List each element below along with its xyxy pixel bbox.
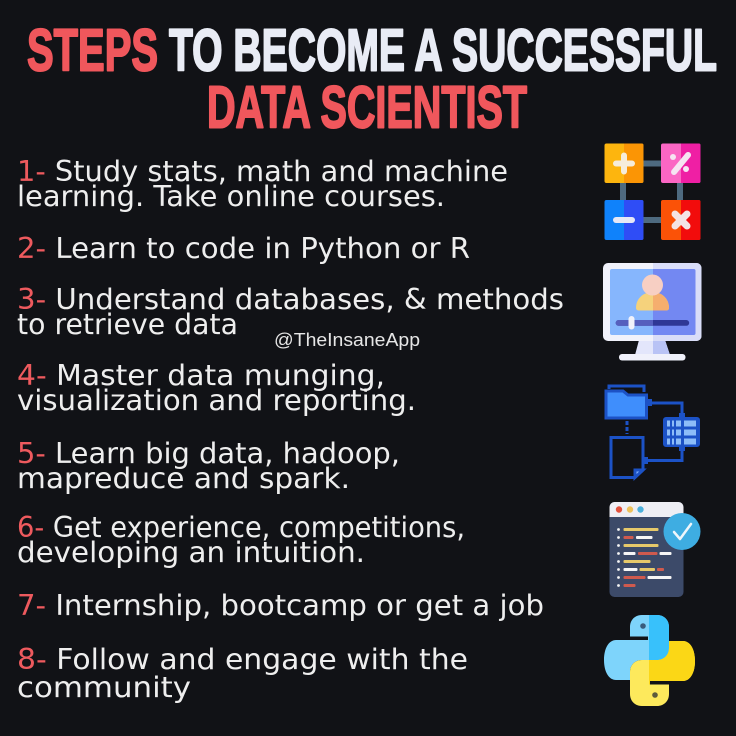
step 6 text: 6- Get experience, competitions,: [17, 511, 465, 544]
step 1 text: 1- Study stats, math and machine: [17, 155, 508, 188]
step 5 text: mapreduce and spark.: [17, 462, 350, 495]
step 5 text: 5- Learn big data, hadoop,: [17, 437, 400, 470]
watermark: @TheInsaneApp: [274, 330, 420, 350]
step 8 text: [17, 643, 468, 704]
step 4 text: 4- Master data munging,: [17, 359, 385, 392]
icon: code window with check badge: [610, 502, 700, 597]
step 8 text: community: [17, 671, 191, 704]
step 6 text: developing an intuition.: [17, 536, 365, 569]
step 3 text: [17, 283, 564, 341]
step 3 text: to retrieve data: [17, 308, 238, 341]
step 1 text: [17, 155, 508, 213]
step 1 text: learning. Take online courses.: [17, 180, 445, 213]
step 8 text: 8- Follow and engage with the: [17, 643, 468, 676]
step 2 text: 2- Learn to code in Python or R: [17, 232, 470, 265]
icon: folder, file and server network: [606, 386, 699, 478]
icon: math operators: [604, 144, 700, 240]
title: STEPS: [27, 18, 158, 84]
title: [27, 18, 717, 140]
step 6 text: [17, 511, 465, 569]
icon: monitor with user profile: [603, 263, 702, 360]
step 3 text: 3- Understand databases, & methods: [17, 283, 564, 316]
icon: python logo: [604, 615, 695, 706]
step 4 text: [17, 359, 416, 417]
step 7 text: 7- Internship, bootcamp or get a job: [17, 589, 544, 622]
step 4 text: visualization and reporting.: [17, 384, 416, 417]
step 5 text: [17, 437, 400, 495]
title: DATA SCIENTIST: [207, 74, 527, 140]
